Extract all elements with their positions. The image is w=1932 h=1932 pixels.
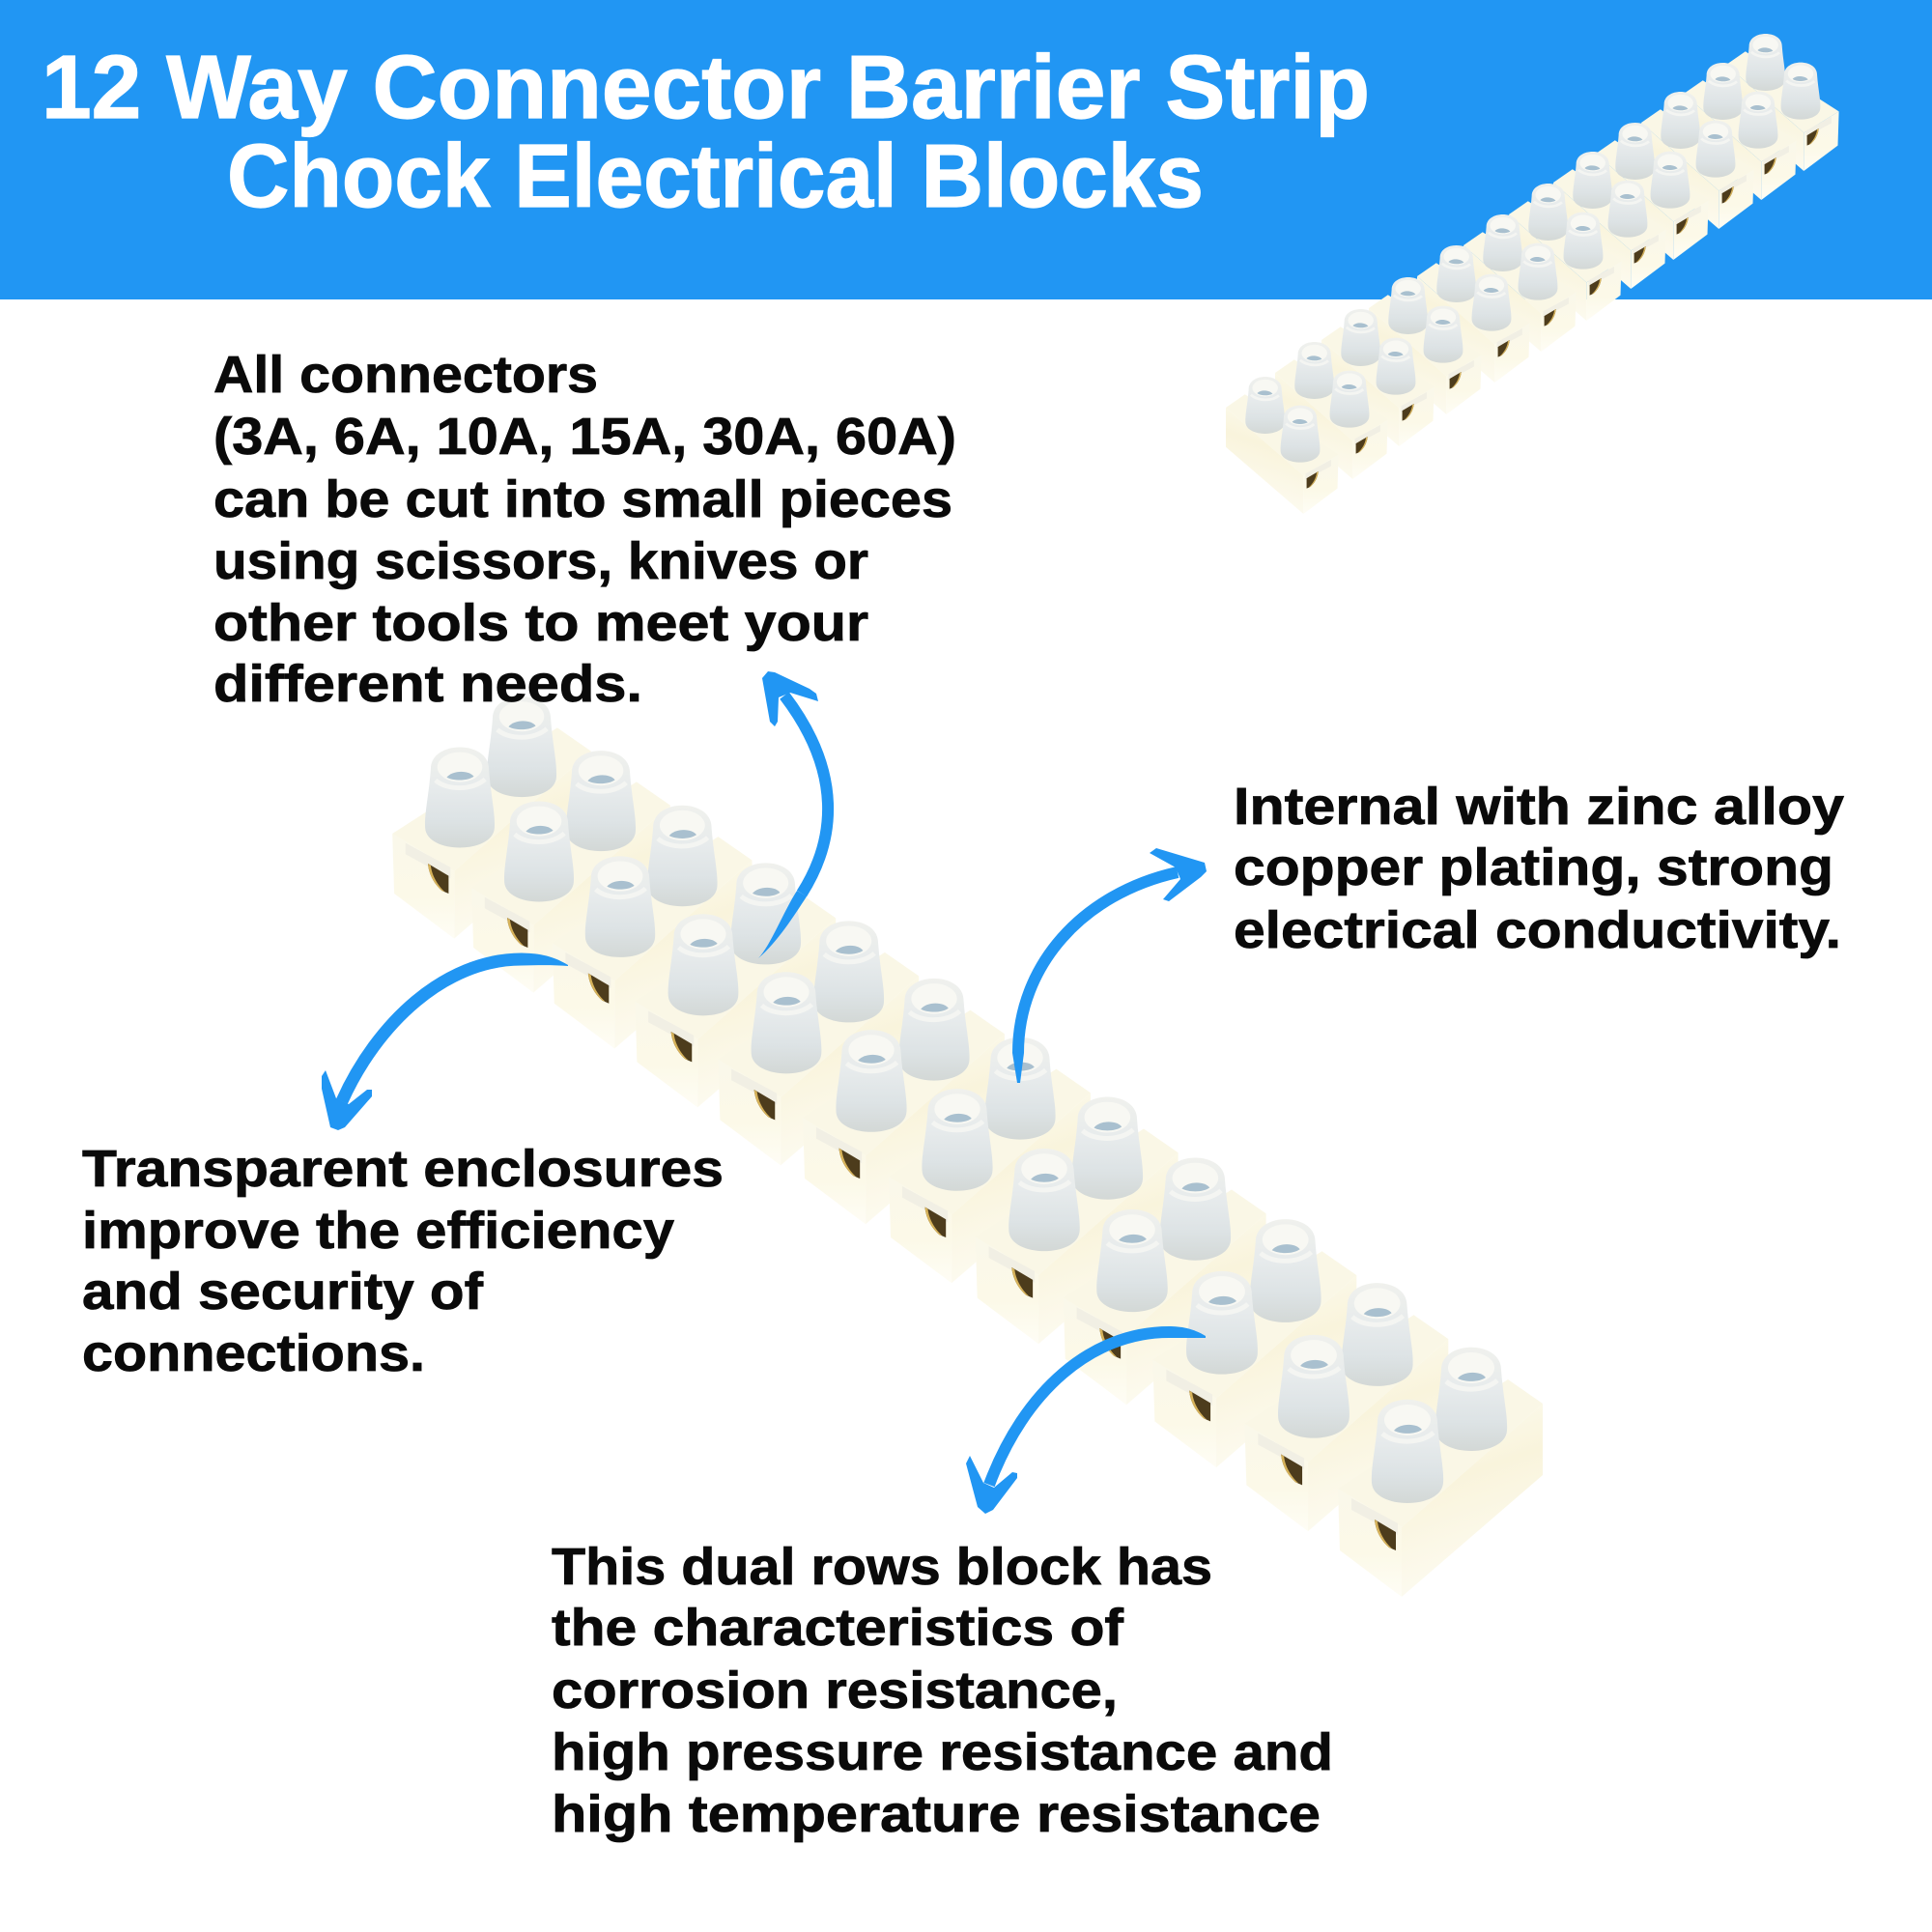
title: [42, 37, 1370, 226]
text block: zinc alloy: Internal with zinc alloy: [1234, 778, 1844, 836]
title: 12 Way Connector Barrier Strip: [42, 37, 1370, 137]
text block: cutting: other tools to meet your: [213, 594, 868, 652]
text block: cutting: can be cut into small pieces: [213, 470, 952, 528]
text block: zinc alloy: copper plating, strong: [1234, 838, 1833, 896]
product photo: small connector strip: [1226, 34, 1839, 514]
arrow: to transparent enclosures text: [322, 952, 568, 1130]
title: Chock Electrical Blocks: [227, 126, 1204, 226]
text block: dual rows: high temperature resistance: [552, 1785, 1321, 1843]
text block: cutting: (3A, 6A, 10A, 15A, 30A, 60A): [213, 408, 956, 466]
arrow: to dual rows text: [966, 1326, 1206, 1514]
text block: transparent enclosures: connections.: [82, 1324, 425, 1382]
text block: cutting: different needs.: [213, 655, 642, 713]
header band: [0, 0, 1932, 299]
text block: dual rows: [552, 1538, 1333, 1843]
arrow: to cutting text: [758, 671, 828, 958]
product photo: large connector strip: [392, 696, 1543, 1597]
text block: cutting: using scissors, knives or: [213, 532, 868, 590]
arrow: to zinc alloy text: [1012, 848, 1207, 1083]
text block: zinc alloy: electrical conductivity.: [1234, 901, 1841, 959]
text block: zinc alloy: [1234, 778, 1844, 959]
text block: transparent enclosures: Transparent enclosures: [82, 1140, 724, 1198]
text block: cutting: [213, 346, 956, 713]
text block: dual rows: the characteristics of: [552, 1599, 1124, 1657]
text block: transparent enclosures: and security of: [82, 1263, 484, 1321]
text block: dual rows: corrosion resistance,: [552, 1662, 1118, 1719]
text block: transparent enclosures: improve the efficiency: [82, 1202, 674, 1260]
text block: dual rows: high pressure resistance and: [552, 1723, 1333, 1781]
text block: dual rows: This dual rows block has: [552, 1538, 1212, 1596]
text block: cutting: All connectors: [213, 346, 598, 404]
text block: transparent enclosures: [82, 1140, 724, 1382]
